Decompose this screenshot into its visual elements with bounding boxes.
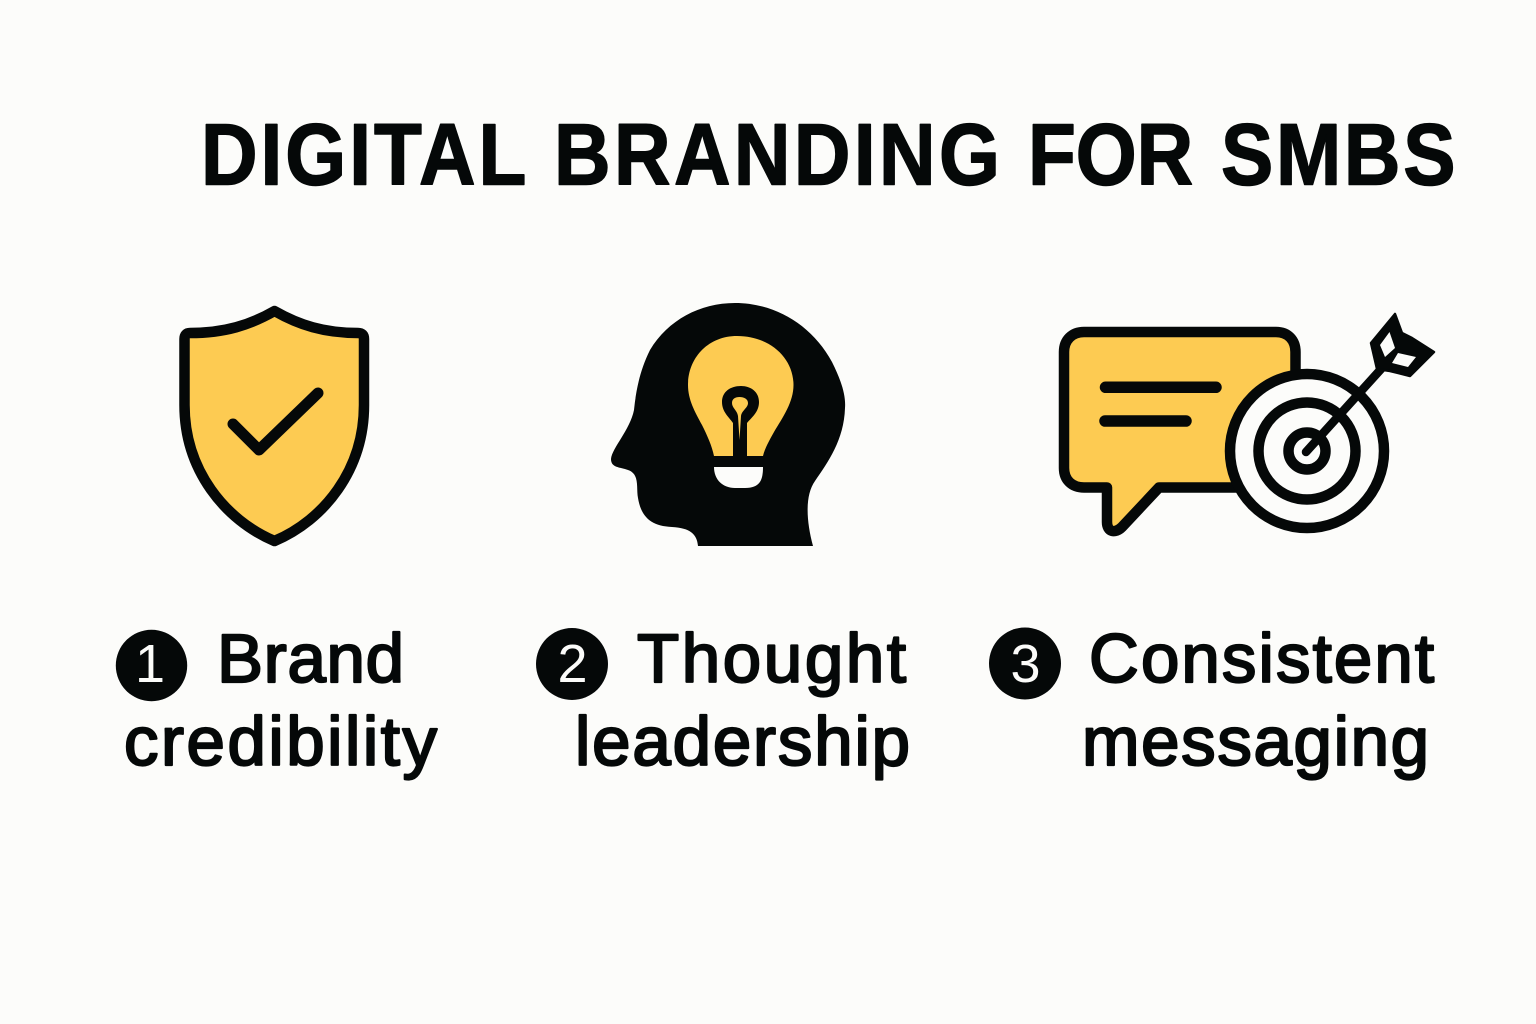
icon: speech bubble with target <box>1064 314 1434 531</box>
label: thought leadership <box>536 620 910 780</box>
icon: shield with check <box>184 311 364 541</box>
badge 1: 1 <box>135 634 165 694</box>
badge 1 <box>116 630 187 701</box>
title: BRANDING <box>554 106 1000 203</box>
badge 2: 2 <box>557 634 588 694</box>
badge 3: 3 <box>1010 634 1041 694</box>
target <box>1230 374 1384 528</box>
label: brand credibility: credibility <box>124 703 438 780</box>
light bulb <box>688 336 794 488</box>
label: brand credibility <box>116 620 438 780</box>
badge 3 <box>989 628 1061 700</box>
badge 2 <box>536 628 608 700</box>
arrow <box>1306 314 1434 452</box>
label: consistent messaging <box>989 620 1434 780</box>
label: consistent messaging: Consistent <box>1089 620 1434 697</box>
label: thought leadership: Thought <box>637 620 906 697</box>
speech bubble <box>1064 332 1296 531</box>
title: FOR <box>1028 106 1193 203</box>
label: thought leadership: leadership <box>575 703 910 780</box>
title <box>201 106 1455 203</box>
title: DIGITAL <box>201 106 526 203</box>
label: brand credibility: Brand <box>217 620 404 697</box>
label: consistent messaging: messaging <box>1082 703 1429 780</box>
title: SMBS <box>1221 106 1455 203</box>
icon: head with light bulb <box>611 303 845 546</box>
